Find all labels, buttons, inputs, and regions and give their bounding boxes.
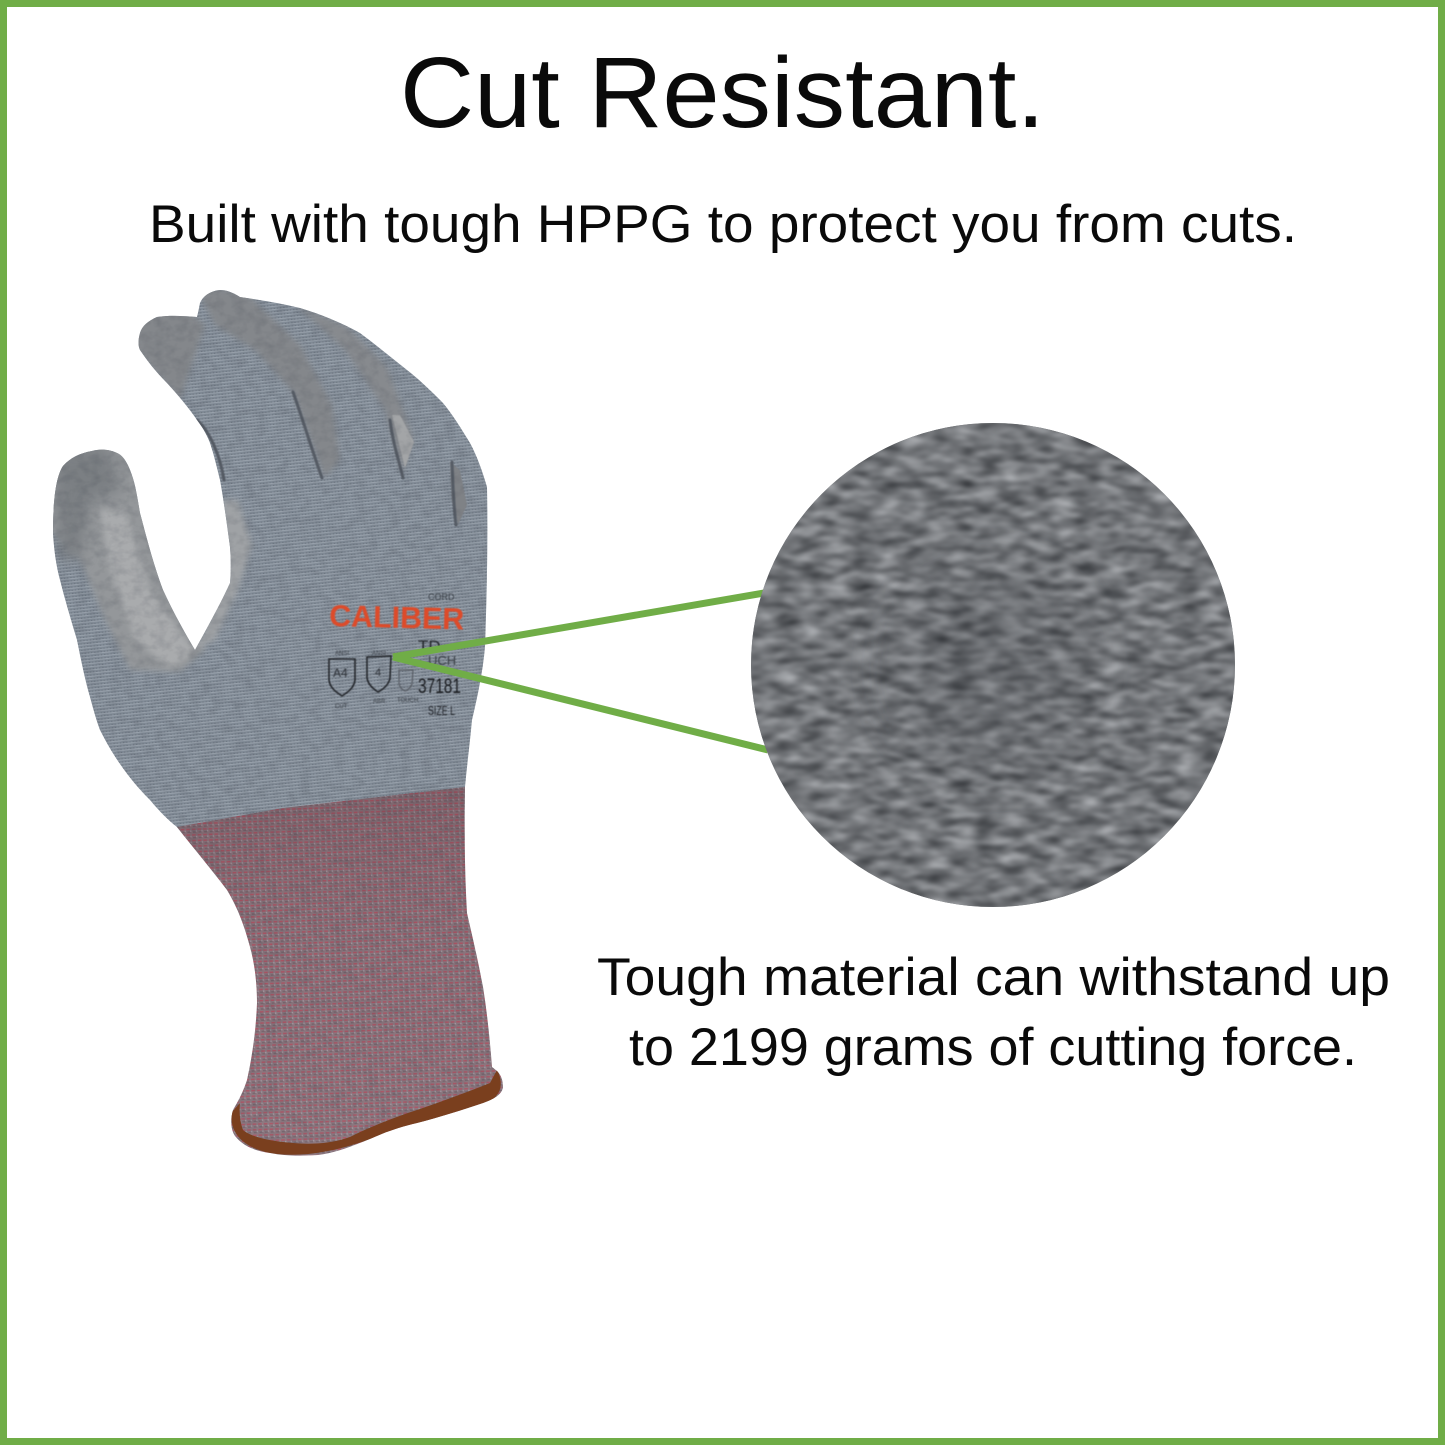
cuff hem [232,1070,501,1155]
cuff [177,787,503,1156]
small label text: ANSI [372,651,386,657]
icon: abrasion rating shield [367,656,391,692]
detail caption [597,948,1390,1077]
small label text: UCH [428,653,456,668]
small label text [335,592,461,718]
icon: touch rating shield [399,670,413,691]
small label text: 37181 [418,675,461,698]
mottled shading [40,280,510,1170]
small label text: TOUCH [397,698,418,704]
small label text: ANSI [335,651,349,657]
icon: cut rating shield [329,659,355,696]
small label text: CUT [335,704,348,710]
small label text: TD [418,637,441,656]
magnified fabric swatch [751,423,1235,907]
glove illustration [40,280,520,1170]
finger creases [197,392,456,525]
icon: cut rating shield: A4 [333,666,348,680]
icon: abrasion rating shield: 4 [375,667,381,679]
small label text: ABR [373,699,386,705]
small label text: CORD [428,592,455,602]
palm coating on thumb [40,440,252,672]
detail caption: to 2199 grams of cutting force. [629,1018,1357,1077]
fingertip coating [135,285,467,525]
subtitle: Built with tough HPPG to protect you from cuts. [149,195,1297,254]
callout pointer lines [393,593,768,750]
glove body knit [40,280,510,840]
logo: CALIBER: CALIBER [329,598,465,637]
small label text: SIZE L [428,703,455,718]
detail caption: Tough material can withstand up [597,948,1390,1007]
title: Cut Resistant. [400,37,1045,149]
